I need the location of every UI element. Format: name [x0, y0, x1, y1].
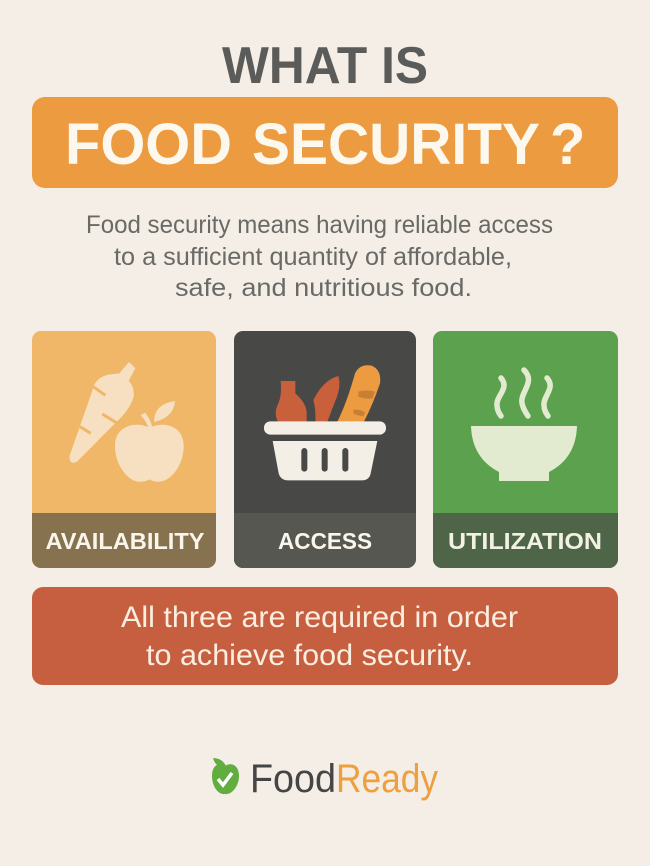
title: WHAT IS: WHAT IS [222, 37, 428, 95]
panel: access [234, 331, 416, 568]
label: access: ACCESS [278, 528, 372, 554]
callout: all three required: to achieve food security. [146, 639, 473, 672]
label: availability: AVAILABILITY [46, 528, 205, 554]
heading banner: FOOD SECURITY?: ? [550, 112, 585, 177]
heading banner: FOOD SECURITY?: FOOD [65, 112, 232, 177]
icon: food basket [264, 365, 386, 480]
wordmark: Food [250, 757, 336, 801]
heading banner: FOOD SECURITY? [32, 97, 618, 188]
text block: definition: Food security means having reliable access [86, 211, 553, 239]
callout: all three required: All three are required in order [121, 601, 518, 634]
icon: carrot and apple [69, 362, 184, 482]
icon: steaming bowl [471, 370, 577, 481]
wordmark: Ready [336, 757, 438, 801]
heading banner: FOOD SECURITY?: SECURITY [252, 112, 540, 177]
panel: utilization [433, 331, 618, 568]
text block: definition: to a sufficient quantity of affordable, [114, 243, 512, 271]
text block: definition [86, 211, 553, 302]
text block: definition: safe, and nutritious food. [175, 274, 472, 302]
label: utilization: UTILIZATION [448, 528, 602, 554]
icon: apple check [212, 758, 239, 794]
callout: all three required [32, 587, 618, 685]
logo: FoodReady [212, 757, 438, 801]
panel: availability [32, 331, 216, 568]
